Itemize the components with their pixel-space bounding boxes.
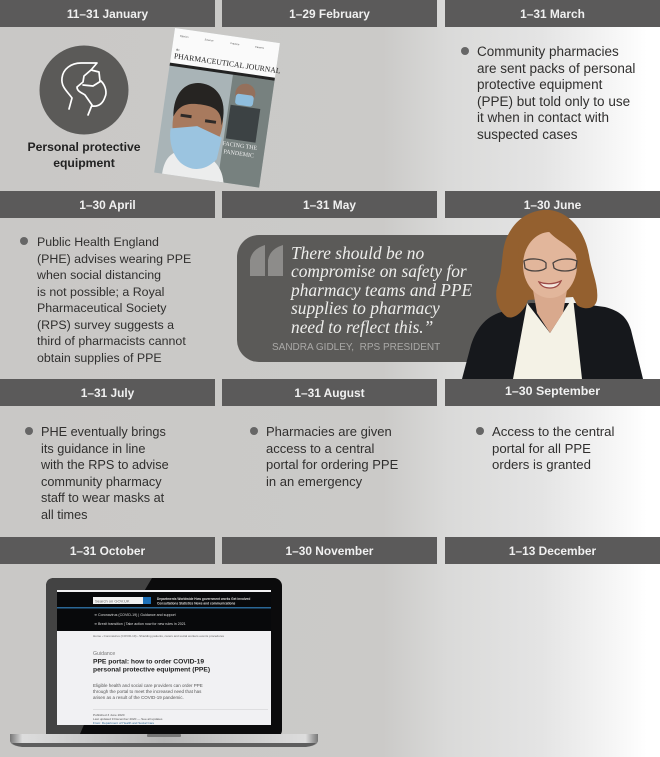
August text: in an emergency <box>266 474 362 489</box>
laptop with PPE portal page: arisen as a result of the COVID-19 pandemic. <box>93 695 184 700</box>
icon label: Personal protective <box>27 140 141 154</box>
March text: protective equipment <box>477 77 602 92</box>
laptop with PPE portal page: Eligible health and social care providers can order PPE <box>93 683 203 688</box>
March text: suspected cases <box>477 127 578 142</box>
laptop with PPE portal page: Guidance <box>93 651 115 657</box>
date header: 1-31 October <box>0 537 215 564</box>
portrait: Sandra Gidley <box>462 210 643 379</box>
August text: access to a central <box>266 441 374 456</box>
icon label: equipment <box>53 156 115 170</box>
magazine cover: Opinion <box>180 35 189 39</box>
bullet: July <box>25 425 169 522</box>
magazine cover: Careers <box>255 46 265 50</box>
icon: face with mask <box>40 46 128 134</box>
icon: quote marks <box>250 245 283 276</box>
August text: portal for ordering PPE <box>266 457 398 472</box>
September text: orders is granted <box>492 457 591 472</box>
magazine cover: Science <box>204 38 214 43</box>
July text: all times <box>41 508 88 522</box>
magazine cover: the <box>176 47 181 52</box>
September text <box>492 424 614 472</box>
laptop with PPE portal page: through the portal to meet the increased need that has <box>93 689 202 694</box>
April text: when social distancing <box>37 268 161 282</box>
laptop with PPE portal page: personal protective equipment (PPE) <box>93 666 210 674</box>
quote attribution: SANDRA GIDLEY, RPS PRESIDENT <box>272 342 440 353</box>
date header: 1-29 February <box>222 0 437 27</box>
March text <box>477 44 635 142</box>
date header: 1-31 May <box>222 191 437 218</box>
magazine cover: PANDEMIC <box>223 149 254 160</box>
July text: staff to wear masks at <box>41 491 164 505</box>
date header: 1-31 August: 1–31 August <box>294 386 365 400</box>
laptop with PPE portal page <box>10 578 318 747</box>
laptop with PPE portal page: PPE portal: how to order COVID-19 <box>93 658 204 666</box>
date header: 11-31 January <box>0 0 215 27</box>
April text: Public Health England <box>37 235 159 249</box>
date header: 1-13 December: 1–13 December <box>509 544 596 558</box>
magazine cover <box>154 28 281 188</box>
July text <box>41 425 169 522</box>
April text: (RPS) survey suggests a <box>37 318 174 332</box>
laptop with PPE portal page: ➔ Brexit transition | Take action now for new rules in 2021 <box>94 622 186 626</box>
April text: obtain supplies of PPE <box>37 350 162 364</box>
icon label <box>27 140 141 170</box>
quote text: supplies to pharmacy <box>291 298 440 318</box>
bullet dot <box>476 427 484 435</box>
bullet: April <box>20 235 191 364</box>
bullet: March <box>461 44 635 142</box>
date header: 1-31 May: 1–31 May <box>303 198 356 212</box>
bullet: September <box>476 424 614 472</box>
laptop with PPE portal page: Home › Coronavirus (COVID-19) › Shielding patients, carers and social workers events procedures <box>93 634 225 638</box>
date header: 1-30 June <box>445 191 660 218</box>
bullet dot <box>25 427 33 435</box>
July text: PHE eventually brings <box>41 425 166 439</box>
laptop with PPE portal page: From: Department of Health and Social Care <box>93 721 154 725</box>
laptop with PPE portal page: Consultations Statistics News and communications <box>157 602 236 606</box>
bullet: August <box>250 424 398 489</box>
date header: 1-29 February: 1–29 February <box>289 7 370 21</box>
July text: community pharmacy <box>41 475 162 489</box>
date header: 1-30 November: 1–30 November <box>286 544 373 558</box>
date header: 1-30 June: 1–30 June <box>524 198 581 212</box>
magazine cover: PHARMACEUTICAL JOURNAL <box>173 51 281 75</box>
date header: 1-30 November <box>222 537 437 564</box>
quote text: compromise on safety for <box>291 261 467 281</box>
August text <box>266 424 398 489</box>
date header: 1-30 September: 1–30 September <box>505 384 600 398</box>
April text: is not possible; a Royal <box>37 284 164 298</box>
bullet dot <box>250 427 258 435</box>
date header: 11-31 January: 11–31 January <box>67 7 148 21</box>
April text: (PHE) advises wearing PPE <box>37 252 191 266</box>
March text: it when in contact with <box>477 110 609 125</box>
March text: (PPE) but told only to use <box>477 94 630 109</box>
magazine cover: FACING THE <box>222 141 258 152</box>
laptop with PPE portal page: Search on GOV.UK <box>95 598 130 604</box>
September text: portal for all PPE <box>492 441 591 456</box>
magazine cover: Practice <box>230 42 240 46</box>
quote text: pharmacy teams and PPE <box>291 280 472 300</box>
April text <box>37 235 191 364</box>
date header: 1-31 July <box>0 379 215 406</box>
March text: are sent packs of personal <box>477 61 635 76</box>
date header: 1-30 April: 1–30 April <box>79 198 136 212</box>
April text: Pharmaceutical Society <box>37 301 166 315</box>
laptop with PPE portal page: ➔ Coronavirus (COVID-19) | Guidance and support <box>94 613 176 617</box>
date header: 1-30 September <box>445 379 660 406</box>
laptop with PPE portal page: Published 3 June 2020 <box>93 713 125 717</box>
date header: 1-31 July: 1–31 July <box>81 386 134 400</box>
July text: its guidance in line <box>41 442 145 456</box>
date header: 1-31 August <box>222 379 437 406</box>
panel: quote <box>237 235 537 362</box>
quote text <box>290 243 472 337</box>
bullet dot <box>461 47 469 55</box>
September text: Access to the central <box>492 424 614 439</box>
date header: 1-31 March <box>445 0 660 27</box>
laptop with PPE portal page: Departments Worldwide How government works Get involved <box>157 597 250 601</box>
August text: Pharmacies are given <box>266 424 392 439</box>
date header: 1-31 October: 1–31 October <box>70 544 145 558</box>
July text: with the RPS to advise <box>41 458 169 472</box>
bullet dot <box>20 237 28 245</box>
laptop with PPE portal page: Last updated 9 December 2020 — See all updates <box>93 717 163 721</box>
date header: 1-30 April <box>0 191 215 218</box>
March text: Community pharmacies <box>477 44 619 59</box>
April text: third of pharmacists cannot <box>37 334 186 348</box>
date header: 1-13 December <box>445 537 660 564</box>
quote text: need to reflect this.” <box>291 317 433 337</box>
quote text: There should be no <box>291 243 424 263</box>
date header: 1-31 March: 1–31 March <box>520 7 585 21</box>
